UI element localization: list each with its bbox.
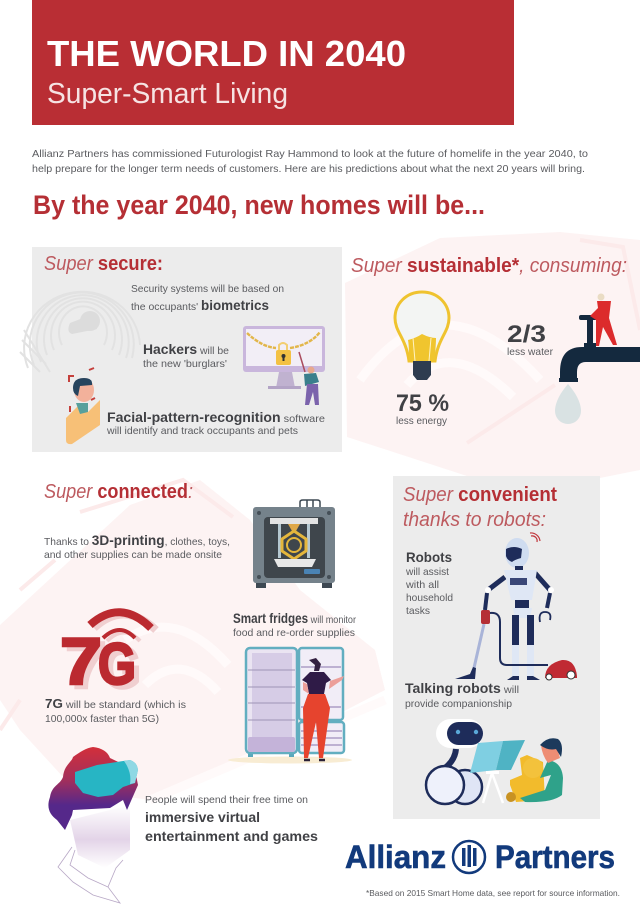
text: biometrics: Security systems will be based on: [131, 283, 284, 295]
panel: super convenient: [393, 476, 600, 819]
text: robots: with all: [405, 579, 439, 591]
text: talking robots: Talking robots will: [405, 681, 519, 696]
icon: locked monitor with hacker: [243, 326, 325, 405]
text: smart fridges: [233, 611, 356, 639]
text: smart fridges: food and re-order supplies: [233, 627, 355, 639]
main heading: By the year 2040, new homes will be...: [33, 190, 485, 220]
panel: super sustainable: [351, 255, 640, 427]
stat: 75%: less energy: [396, 415, 448, 427]
text: robots: household: [406, 592, 453, 604]
heading: super convenient: Super convenient: [403, 484, 557, 506]
icon: 7G wifi: G: [98, 632, 136, 697]
text: 7G: 100,000x faster than 5G): [45, 713, 159, 725]
text: immersive entertainment: entertainment and games: [145, 829, 318, 844]
text: 3D printing: and other supplies can be made onsite: [44, 549, 222, 561]
text: facial recognition: Facial-pattern-recognition software: [107, 410, 325, 425]
title: THE WORLD IN 2040: [47, 33, 406, 74]
icon: light bulb: [395, 292, 449, 380]
logo: Allianz Partners: Partners: [495, 839, 615, 875]
icon: fridge with person: [228, 648, 352, 764]
heading: super convenient: thanks to robots:: [403, 509, 546, 531]
logo: Allianz Partners: Allianz: [345, 839, 446, 875]
subtitle: Super-Smart Living: [47, 78, 288, 110]
panel: super secure: [20, 247, 342, 452]
text: immersive entertainment: immersive virtual: [145, 810, 260, 825]
icon: face recognition man: [66, 368, 100, 444]
stat: 2/3: [507, 321, 553, 358]
heading: super connected: Super connected:: [44, 481, 193, 503]
icon: tap with red figure: [555, 294, 640, 424]
text: robots: tasks: [406, 605, 430, 617]
text: facial recognition: [106, 410, 325, 437]
text: biometrics: the occupants' biometrics: [131, 298, 269, 313]
intro text: help prepare for the longer term needs of customers. Here are his predictions about what the next 20 years will bring.: [32, 163, 585, 175]
heading: super secure: Super secure:: [44, 253, 163, 275]
intro text: [32, 148, 588, 175]
icon: companion robot with child and bear: [426, 719, 563, 804]
text: 3D printing: Thanks to 3D-printing, clothes, toys,: [44, 532, 230, 548]
text: 3D printing: [44, 532, 230, 561]
text: 7G: 7G will be standard (which is: [45, 696, 186, 711]
text: facial recognition: will identify and track occupants and pets: [106, 425, 298, 437]
heading: super sustainable: Super sustainable*, consuming:: [351, 255, 627, 277]
logo: Allianz Partners: [345, 839, 615, 875]
footnote: *Based on 2015 Smart Home data, see report for source information.: [366, 888, 620, 898]
icon: VR headset person: [48, 747, 138, 903]
stat: 2/3: 2/3: [507, 321, 546, 348]
text: hackers: [143, 341, 229, 370]
text: robots: will assist: [405, 566, 449, 578]
text: smart fridges: Smart fridges will monitor: [233, 611, 356, 626]
icon: 7G wifi: 7: [65, 628, 107, 702]
text: robots: Robots: [406, 549, 452, 565]
text: talking robots: provide companionship: [405, 698, 512, 710]
text: immersive entertainment: People will spend their free time on: [145, 794, 308, 806]
text: hackers: Hackers will be: [143, 341, 229, 357]
icon: 7G wifi: [60, 612, 156, 702]
icon: 3D printer: [253, 500, 335, 588]
header banner: [32, 0, 514, 125]
icon: robot with vacuum: [455, 533, 577, 680]
text: 7G: [45, 696, 186, 725]
icon: fingerprint with keyhole: [20, 292, 140, 372]
text: hackers: the new 'burglars': [143, 358, 227, 370]
text: biometrics: [131, 283, 284, 313]
icon: 7G wifi: G: [103, 636, 141, 701]
heading: super convenient: [403, 484, 557, 531]
intro text: Allianz Partners has commissioned Futurologist Ray Hammond to look at the future of homelife in the year 2040, to: [32, 148, 588, 160]
text: talking robots: [405, 681, 519, 710]
stat: 2/3: less water: [507, 346, 553, 358]
panel: super connected: [44, 481, 356, 903]
icon: 7G wifi: 7: [60, 624, 102, 698]
text: robots: [405, 549, 453, 617]
background watermark: tablets and wifi: [0, 232, 640, 800]
stat: 75%: 75 %: [396, 390, 449, 417]
text: immersive entertainment: [145, 794, 318, 844]
